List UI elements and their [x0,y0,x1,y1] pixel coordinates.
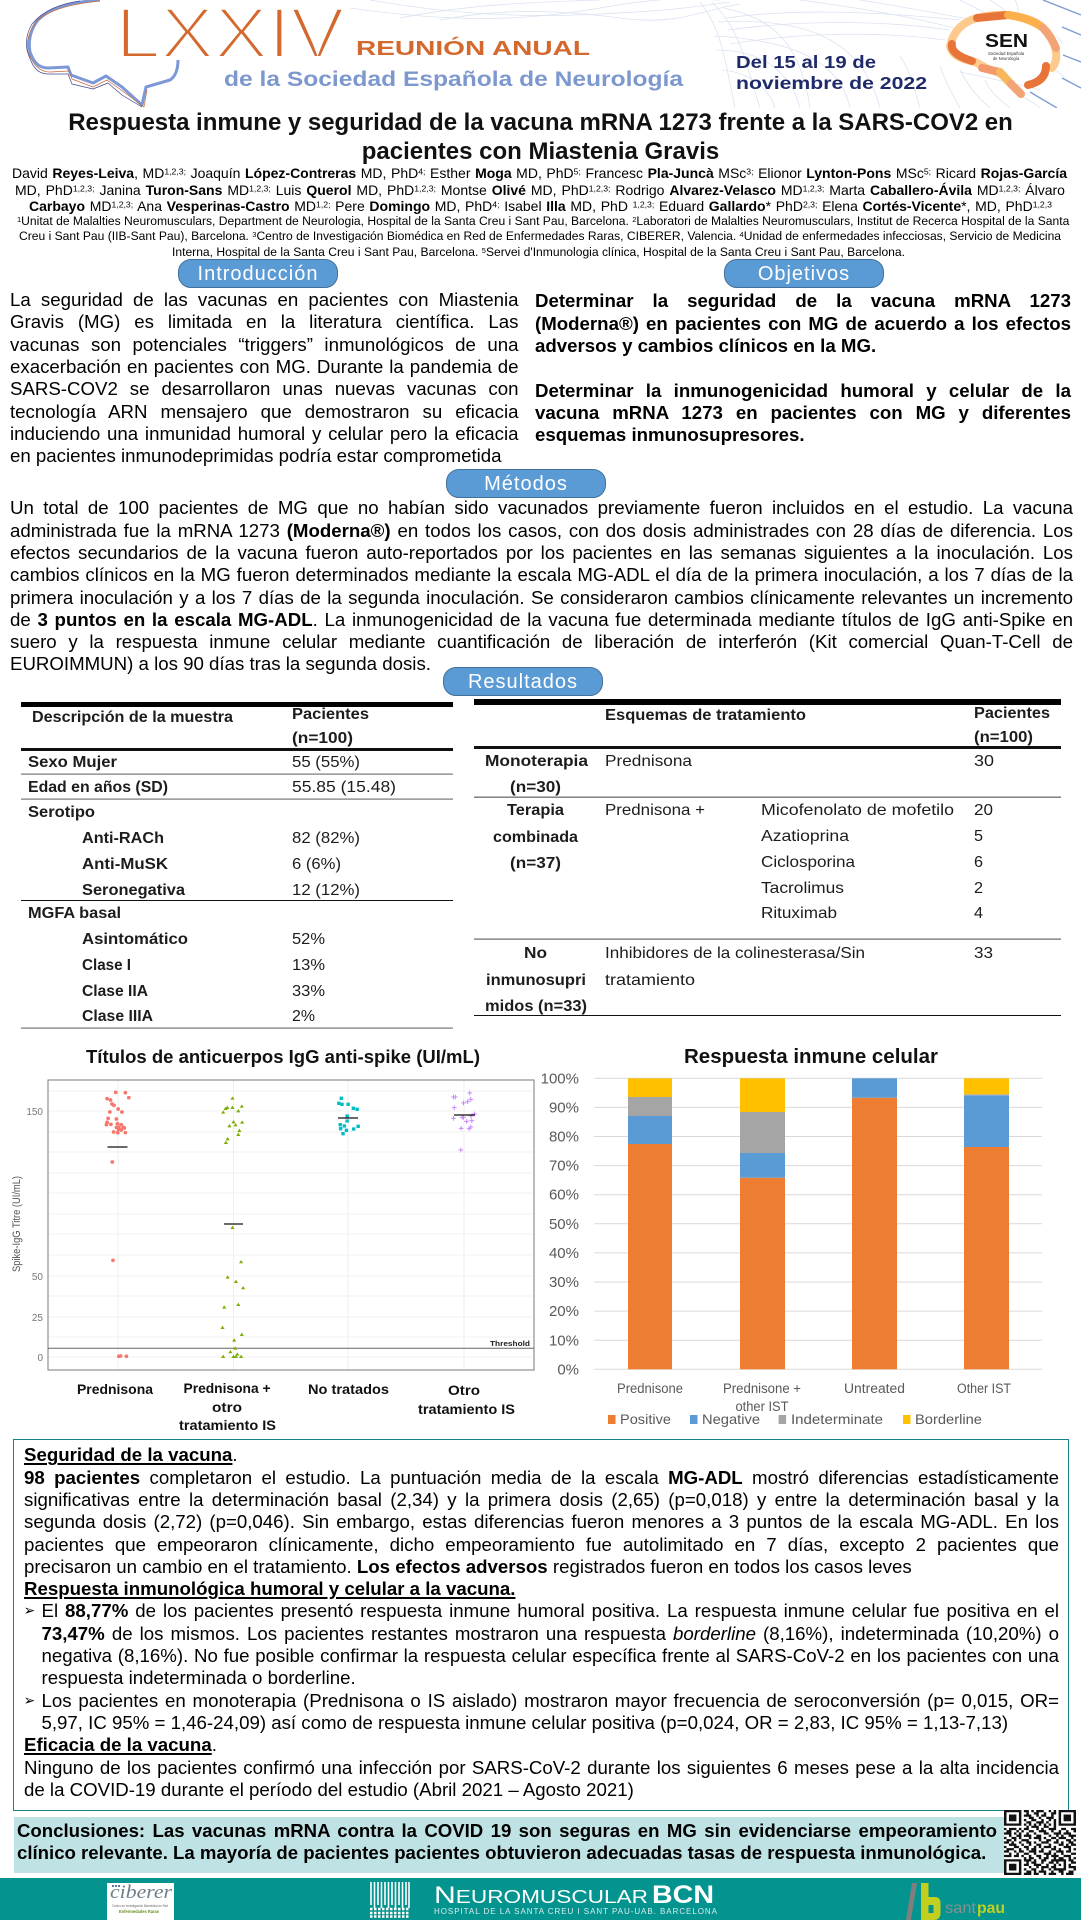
x axis labels: Prednisona + [184,1380,270,1396]
y axis labels: 80% [549,1128,579,1146]
row labels: Anti-RACh [82,830,164,847]
y axis labels: 90% [549,1100,579,1116]
x axis labels: Otro [448,1382,480,1398]
table header: (n=100) [974,729,1033,746]
row labels: Clase I [82,957,131,974]
x axis labels: other IST [736,1399,788,1414]
row: terapia combinada: Ciclosporina [761,854,855,871]
table: descripción de la muestra [21,702,453,1029]
text block: introducción: Gravis (MG) es limitada en la literatura científica. Las [10,311,518,332]
title [68,109,1013,165]
row labels: Seronegativa [82,882,185,899]
row labels: Edad en años (SD) [28,779,168,796]
text block: métodos: de 3 puntos en la escala MG-ADL. La inmunogenicidad de la vacuna fue determinada mediante títulos de IgG anti-Spike en [10,609,1073,630]
bar: untreated [852,1078,897,1369]
row values: 2% [292,1008,315,1025]
table header [605,705,1050,746]
mean bars [108,1115,475,1224]
dates: noviembre de 2022 [736,73,927,93]
bar: prednisone + other IST [740,1078,785,1369]
y axis labels: 60% [549,1186,579,1204]
x axis labels: otro [212,1399,242,1415]
logo: Sant Pau [906,1883,1005,1920]
text block: resultados: 5,97, IC 95% = 1,46-24,09) así como de respuesta inmune celular positiva (p=0,024, OR = 2,83, IC 95% = 1,13-7,13) [42,1712,1008,1733]
text block: resultados: negativa (8,16%). No fue posible confirmar la respuesta celular específica frente al SARS-CoV-2 en los pacientes con una [42,1645,1059,1666]
text block: resultados [24,1444,1059,1800]
row: monoterapia: Prednisona [605,753,692,770]
row values: 13% [292,957,325,974]
row: terapia combinada: Micofenolato de mofetilo [761,802,954,819]
logo: SEN: Sociedad Española [988,51,1025,56]
authors: MD, PhD1,2,3; Janina Turon-Sans MD1,2,3; Luis Querol MD, PhD1,2,3; Montse Olivé MD, PhD1,2,3; Rodrigo Alvarez-Velasco MD1,2,3; Marta Caballero-Ávila MD1,2,3; Álvaro [15,182,1065,198]
y axis ticks: 25 [32,1313,43,1324]
logo: SEN: SEN [985,31,1028,51]
data points: prednisona + otro [220,1096,245,1358]
x axis labels: tratamiento IS [418,1401,515,1417]
text block: resultados: El 88,77% de los pacientes presentó respuesta inmune humoral positiva. La respuesta inmune celular fue positiva en el [42,1600,1059,1621]
y axis labels: 50% [549,1216,579,1233]
logo: Neuromuscular BCN: NEUROMUSCULAR [434,1882,648,1909]
y axis title: Spike-IgG Titre (UI/mL) [11,1176,23,1272]
y axis labels [541,1070,579,1378]
text block: objetivos: Determinar la inmunogenicidad humoral y celular de la [535,380,1071,401]
society name: de la Sociedad Española de Neurología [224,68,683,91]
row labels: Clase IIA [82,983,148,1000]
text block: métodos: cambios clínicos en la MG fueron determinados mediante la escala MG-ADL el día de la primera inoculación, a los 7 días de la [10,564,1073,585]
logo: Sant Pau: pau [977,1900,1005,1917]
row values: 55.85 (15.48) [292,779,396,796]
text block: resultados: pacientes que empeoraron clínicamente, dicho empeoramiento fue autolimitado en 7 días, excepto 2 pacientes que [24,1534,1059,1555]
row: terapia combinada: (n=37) [510,855,561,872]
text block: métodos: administrada fue la mRNA 1273 (Moderna®) en todos los casos, con dos dosis administrades con 28 días de diferencia. Los [10,520,1073,541]
row: terapia combinada: 2 [974,880,983,897]
x axis labels: Untreated [844,1381,905,1396]
row labels: Serotipo [28,804,95,821]
row: no inmunosuprimidos: inmunosupri [486,972,586,989]
section heading: Introducción: Introducción [198,263,318,285]
row: no inmunosuprimidos [485,945,993,1015]
section heading: Objetivos [724,259,884,288]
legend: Positive [620,1411,671,1427]
y axis labels: 70% [549,1158,579,1174]
data points: otro tratamiento [451,1091,477,1152]
chart: títulos de anticuerpos (dot plot) [11,1047,534,1433]
row: monoterapia: Monoterapia [485,753,588,770]
row: terapia combinada: Tacrolimus [761,880,844,897]
x axis labels: Other IST [957,1381,1011,1396]
reunion anual: REUNIÓN ANUAL [356,36,590,60]
x axis labels [77,1380,515,1433]
data points: prednisona [105,1090,131,1358]
dates [736,52,927,93]
text block: introducción [10,289,518,466]
text block: conclusiones: clínico relevante. La mayoría de pacientes pacientes obtuvieron adecuadas tasas de respuesta inmunológica. [17,1842,986,1863]
logo: ciberer: Enfermedades Raras [119,1909,160,1914]
section heading: Resultados: Resultados [468,671,578,693]
text block: resultados: Respuesta inmunológica humoral y celular a la vacuna. [24,1578,515,1599]
row: terapia combinada: Rituximab [761,905,837,922]
gridlines [594,1078,1042,1369]
text block: introducción: induciendo una inmunidad humoral y celular pero la eficacia [10,423,518,444]
chart title: Títulos de anticuerpos IgG anti-spike (UI/mL) [86,1047,480,1067]
logo: ciberer [107,1882,174,1920]
text block: resultados: significativas entre la determinación basal (2,34) y la primera dosis (2,65) (p=0,018) y entre la determinación basal y la [24,1489,1059,1510]
authors: David Reyes-Leiva, MD1,2,3; Joaquín López-Contreras MD, PhD4; Esther Moga MD, PhD5; Francesc Pla-Juncà MSc3; Elionor Lynton-Pons MSc5; Ricard Rojas-García [12,165,1067,181]
row labels: Anti-MuSK [82,856,168,873]
text block: introducción: SARS-COV2 se desarrollaron unas nuevas vacunas con [10,378,518,399]
x axis labels: Prednisone + [723,1381,801,1396]
y axis labels: 30% [549,1274,579,1291]
row labels: MGFA basal [28,905,121,922]
panel: conclusiones [14,1817,1004,1873]
row: monoterapia [485,753,994,796]
table header: Pacientes [974,705,1050,722]
row values: 52% [292,931,325,948]
table header [32,706,369,747]
x axis labels: tratamiento IS [179,1417,276,1433]
logo: ciberer: Centro de Investigación Biomédica en Red [112,1904,168,1908]
row: terapia combinada: Prednisona + [605,802,705,819]
icon: brain outline [27,0,178,107]
text block: resultados: 98 pacientes completaron el estudio. La puntuación media de la escala MG-ADL mostró diferencias estadísticamente [24,1467,1059,1488]
text block: resultados: respuesta indeterminada o borderline. [42,1667,356,1688]
table header: Esquemas de tratamiento [605,707,806,724]
text block: introducción: La seguridad de las vacunas en pacientes con Miastenia [10,289,518,310]
plot grid [48,1080,534,1370]
row: terapia combinada: Terapia [507,802,564,819]
legend [608,1411,982,1427]
text block: métodos: efectos secundarios de la vacuna fueron auto-reportados por los pacientes en las semanas siguientes a la inoculación. Los [10,542,1073,563]
text block: resultados: Los pacientes en monoterapia (Prednisona o IS aislado) mostraron mayor frecuencia de seroconversión (p= 0,015, OR= [42,1690,1059,1711]
text block: resultados: ➢ [24,1603,35,1619]
footer band with logos [0,1878,1081,1920]
text block: resultados: Ninguno de los pacientes confirmó una infección por SARS-CoV-2 durante los siguientes 6 meses pese a la alta incidencia [24,1757,1059,1778]
row: no inmunosuprimidos: No [524,945,547,962]
header banner [26,0,1081,108]
affiliations: Creu i Sant Pau (IIB-Sant Pau), Barcelona. 3Centro de Investigación Biomédica en Red de Enfermedades Raras, CIBERER, Valencia. 4Unidad de enfermedades infecciosas, Servicio de Medicina [19,229,1061,243]
row values [292,754,396,1025]
row: terapia combinada: Azatioprina [761,828,849,845]
text block: objetivos: adversos y cambios clínicos en la MG. [535,335,876,356]
text block: introducción: exacerbación en pacientes con MG. Durante la pandemia de [10,356,518,377]
text block: objetivos: esquemas inmunosupresores. [535,424,805,445]
y axis ticks: 0 [37,1353,43,1364]
dates: Del 15 al 19 de [736,52,876,72]
section heading: Métodos [446,469,606,498]
y axis labels: 20% [549,1303,579,1320]
y axis ticks: 50 [32,1272,43,1283]
text block: resultados: Seguridad de la vacuna. [24,1444,238,1465]
y axis ticks: 150 [26,1107,43,1118]
legend: Negative [702,1411,760,1427]
panel: resultados detallados [13,1439,1069,1811]
text block: métodos: suero y la respuesta inmune celular mediante cuantificación de liberación de interferón (Kit comercial Quan-T-Cell de [10,631,1073,652]
y axis labels: 10% [549,1332,579,1350]
row: no inmunosuprimidos: 33 [974,945,993,962]
logo: Neuromuscular BCN: HOSPITAL DE LA SANTA CREU I SANT PAU-UAB. BARCELONA [434,1907,718,1916]
x axis labels: Prednisona [77,1381,153,1397]
row: terapia combinada: 20 [974,802,993,819]
text block: resultados: de la COVID-19 durante el período del estudio (Abril 2021 – Agosto 2021) [24,1779,634,1800]
bar: prednisone [628,1078,672,1369]
text block: métodos: primera inoculación y a los 7 días de la segunda inoculación. Se consideraron cambios clínicamente relevantes un incremento [10,587,1073,608]
section heading: Métodos: Métodos [484,473,568,495]
data points: no tratados [337,1097,360,1135]
section heading: Objetivos: Objetivos [758,263,850,285]
y axis labels: 0% [557,1362,579,1378]
row: terapia combinada: 4 [974,905,983,922]
row: monoterapia: (n=30) [510,779,561,796]
section heading: Introducción [178,259,338,288]
text block: resultados: ➢ [24,1693,35,1709]
row values: 82 (82%) [292,830,360,847]
text block: conclusiones [17,1820,997,1863]
row: terapia combinada [493,802,993,922]
x axis labels: Prednisone [617,1381,683,1396]
authors [12,165,1068,214]
row: terapia combinada: 5 [974,828,983,845]
text block: métodos: EUROIMMUN) a los 90 días tras la segunda dosis. [10,653,431,674]
logo: Neuromuscular BCN [370,1881,718,1916]
row: no inmunosuprimidos: Inhibidores de la colinesterasa/Sin [605,945,865,962]
row values: 12 (12%) [292,882,360,899]
text block: objetivos: vacuna mRNA 1273 en pacientes con MG y diferentes [535,402,1071,423]
row labels: Clase IIIA [82,1008,153,1025]
chart: respuesta inmune celular (stacked bars) [541,1046,1042,1427]
table header: (n=100) [292,730,353,747]
bar: other IST [964,1078,1009,1369]
table header: Pacientes [292,706,369,723]
plot frame [48,1080,534,1370]
row labels: Sexo Mujer [28,754,117,771]
y axis labels: 40% [549,1245,579,1262]
row labels: Asintomático [82,931,188,948]
table header: Descripción de la muestra [32,709,233,726]
text block: resultados: precisaron un cambio en el tratamiento. Los efectos adversos registrados fueron en todos los casos leves [24,1556,912,1577]
icon: QR code [1004,1810,1076,1875]
background mesh [350,0,1065,108]
row: no inmunosuprimidos: midos (n=33) [485,998,587,1015]
affiliations: 1Unitat de Malalties Neuromusculars, Department de Neurologia, Hospital de la Santa Creu i Sant Pau, Barcelona. 2Laboratori de Malalties Neuromusculars, Institut de Recerca Hospital de la Santa [17,214,1069,228]
row values: 55 (55%) [292,754,360,771]
text block: métodos [10,497,1073,674]
text block: objetivos [535,290,1072,445]
logo: Neuromuscular BCN: BCN [652,1881,714,1909]
affiliations: Interna, Hospital de la Santa Creu i Sant Pau, Barcelona. 5Servei d'Inmunologia clínica, Hospital de la Santa Creu i Sant Pau, Barcelona. [172,245,905,259]
text block: conclusiones: Conclusiones: Las vacunas mRNA contra la COVID 19 son seguras en MG sin evidenciarse empeoramiento [17,1820,997,1841]
row: terapia combinada: 6 [974,854,983,871]
legend: Borderline [915,1411,982,1427]
authors: Carbayo MD1,2,3; Ana Vesperinas-Castro MD1,2; Pere Domingo MD, PhD4; Isabel Illa MD, PhD 1,2,3; Eduard Gallardo* PhD2,3; Elena Cortés-Vicente*, MD, PhD1,2,3 [29,198,1052,214]
chart title: Respuesta inmune celular [684,1046,938,1068]
x axis labels: No tratados [308,1381,389,1397]
logo: SEN [950,15,1056,94]
logo: SEN: de Neurología [993,56,1020,61]
legend: Indeterminate [791,1411,883,1427]
table: esquemas de tratamiento [474,699,1061,1016]
logo: ciberer: ciberer [110,1882,173,1903]
text block: resultados: Eficacia de la vacuna. [24,1734,217,1755]
row labels [28,754,188,1025]
section heading: Resultados [443,667,603,696]
row: monoterapia: 30 [974,753,994,770]
y axis ticks [26,1107,43,1364]
x axis labels [617,1381,1011,1414]
corner blue lines [1030,0,1081,108]
row values: 33% [292,983,325,1000]
row values: 6 (6%) [292,856,341,873]
logo: Sant Pau: sant [945,1900,977,1917]
title: pacientes con Miastenia Gravis [362,138,719,165]
title: Respuesta inmune y seguridad de la vacuna mRNA 1273 frente a la SARS-COV2 en [68,109,1013,136]
row: terapia combinada: combinada [493,829,578,846]
text block: métodos: Un total de 100 pacientes de MG que no habían sido vacunados previamente fueron incluidos en el estudio. La vacuna [10,497,1073,518]
row: no inmunosuprimidos: tratamiento [605,972,695,989]
threshold line: Threshold [490,1339,530,1348]
y axis labels: 100% [541,1070,579,1088]
affiliations [17,214,1070,259]
text block: introducción: en pacientes inmunodeprimidas podría estar comprometida [10,445,502,466]
text block: resultados: 73,47% de los mismos. Los pacientes restantes mostraron una respuesta borderline (8,16%), indeterminada (10,20%) o [42,1623,1059,1644]
text block: introducción: vacunas son potenciales “triggers” inmunológicos de una [10,334,518,355]
text block: introducción: tecnología ARN mensajero que demostraron su eficacia [10,401,518,422]
text block: resultados: segunda dosis (2,72) (p=0,046). Sin embargo, estas diferencias fueron menores a 3 puntos de la escala MG-ADL. En los [24,1511,1059,1532]
text block: objetivos: Determinar la seguridad de la vacuna mRNA 1273 [535,290,1071,311]
text block: objetivos: (Moderna®) en pacientes con MG de acuerdo a los efectos [535,313,1071,334]
